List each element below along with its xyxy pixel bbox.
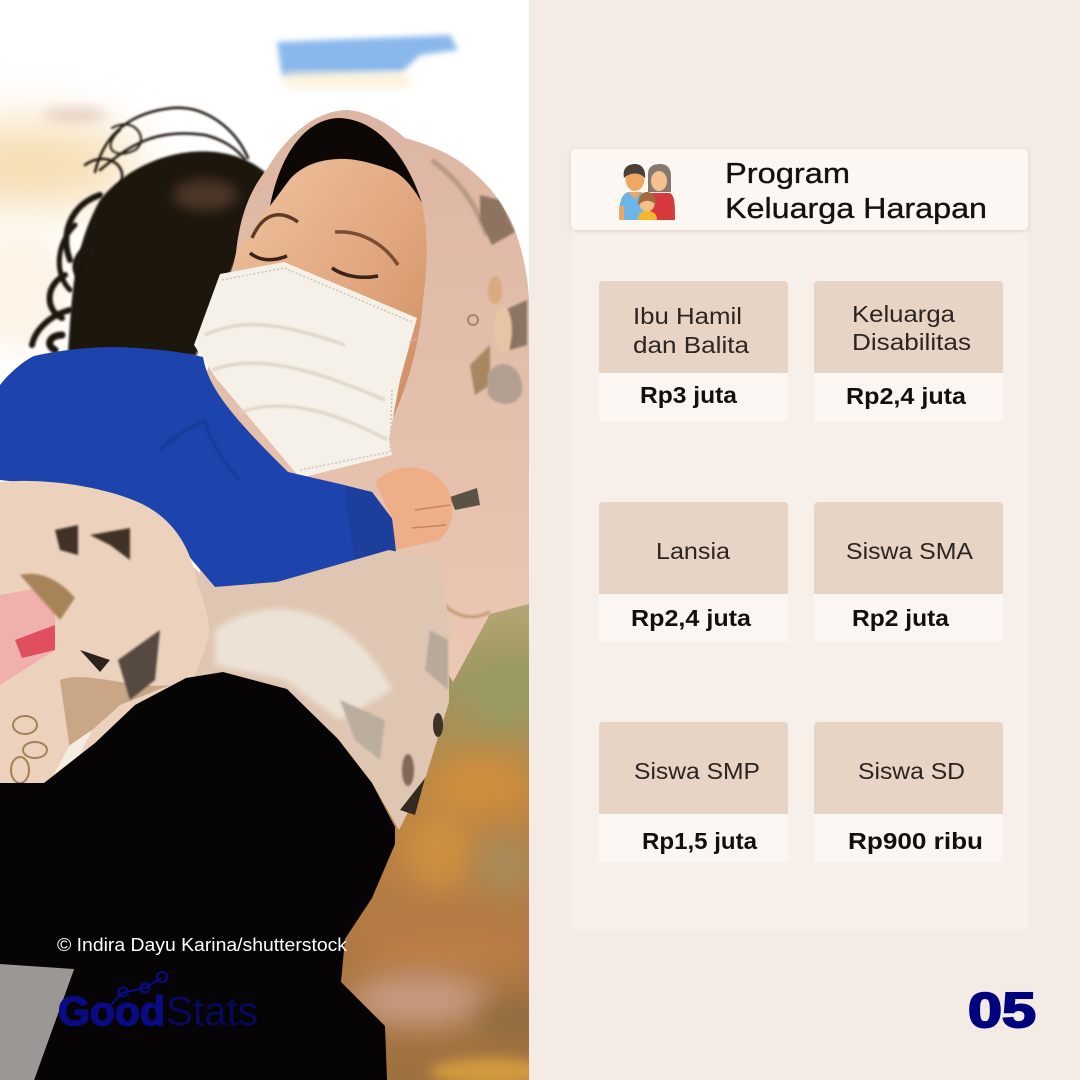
hijab inner black cap — [270, 118, 422, 206]
panel: heading bar — [571, 149, 1028, 230]
autumn blur lower right — [330, 604, 529, 1080]
child's hand — [375, 467, 452, 550]
card: Ibu Hamil dan Balita — [599, 281, 788, 421]
card: Siswa SMP: Siswa SMP — [634, 758, 760, 784]
mother's black clothing — [0, 672, 395, 1080]
card: Keluarga Disabilitas: Keluarga — [852, 301, 956, 327]
heading: Program — [725, 158, 850, 190]
card: Keluarga Disabilitas — [814, 281, 1003, 421]
card: Ibu Hamil dan Balita: Ibu Hamil — [633, 303, 742, 329]
card: Siswa SMA — [814, 502, 1003, 642]
mother's floral sleeve — [170, 550, 449, 830]
card: Siswa SD: Rp900 ribu — [848, 828, 983, 854]
logo: GoodStats: Stats — [166, 988, 258, 1034]
card: Ibu Hamil dan Balita: dan Balita — [633, 332, 750, 358]
photo: mother hugging child wearing mask — [0, 0, 555, 1080]
card: Ibu Hamil dan Balita: Rp3 juta — [640, 382, 738, 408]
card: Lansia — [599, 502, 788, 642]
background: right beige side — [529, 0, 1080, 1080]
card: Siswa SD: Siswa SD — [858, 758, 965, 784]
page number: 05 — [968, 984, 1036, 1038]
icon: family — [619, 164, 675, 220]
hijab — [200, 110, 529, 682]
card: Siswa SMA: Rp2 juta — [852, 605, 950, 631]
blue sweater — [0, 347, 396, 587]
face mask — [194, 262, 417, 478]
card: Siswa SMA: Siswa SMA — [846, 538, 973, 564]
card: Keluarga Disabilitas: Disabilitas — [852, 329, 971, 355]
panel: benefits list background — [571, 225, 1028, 931]
child's curly hair — [32, 108, 265, 356]
logo: GoodStats: Good — [58, 988, 165, 1034]
card: Lansia: Rp2,4 juta — [631, 605, 752, 631]
bunched floral sleeve — [0, 481, 209, 800]
heading — [725, 158, 987, 225]
card: Keluarga Disabilitas: Rp2,4 juta — [846, 383, 967, 409]
card: Siswa SMP — [599, 722, 788, 862]
photo credit: © Indira Dayu Karina/shutterstock — [57, 935, 348, 955]
card: Siswa SD — [814, 722, 1003, 862]
logo: GoodStats — [58, 972, 258, 1034]
card: Siswa SMP: Rp1,5 juta — [642, 828, 758, 854]
heading: Keluarga Harapan — [725, 193, 987, 225]
grey shirt below arm — [0, 964, 74, 1080]
card: Lansia: Lansia — [656, 538, 731, 564]
face — [232, 118, 427, 420]
